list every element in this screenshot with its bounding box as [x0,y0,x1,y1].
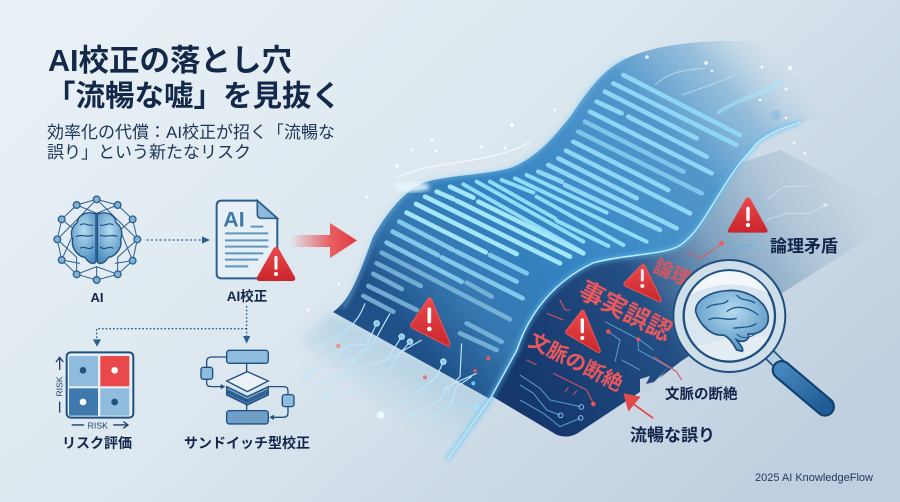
torn edge of sheet [640,366,668,392]
dotted branch arrows [93,306,250,347]
icon: sandwich proofreading flow [201,350,294,424]
red arrow: fluent error [623,393,653,418]
label: AI: AI [90,290,104,305]
error text: jijitsu gonin: 事実誤認 [574,276,676,347]
warning icon: sheet lower [566,310,600,352]
credit: 2025 AI KnowledgeFlow [755,472,873,484]
text lines on ribbon [363,75,740,350]
subtitle: 誤り」という新たなリスク [47,143,251,162]
label: sandwich proofreading: サンドイッチ型校正 [184,435,310,451]
icon: risk matrix: RISK [54,376,64,397]
brain in lens [696,290,768,351]
ribbon circuit traces [302,303,490,422]
subtitle [47,123,335,162]
sparkle particles and arcs [306,55,806,312]
title: 「流暢な嘘」を見抜く [46,80,341,113]
warning icon: ribbon [411,297,450,346]
label: fluent error: 流暢な誤り [630,426,715,445]
icon: AI brain network [54,196,141,283]
red arrow to ribbon [290,223,357,258]
title: AI校正の落とし穴 [48,44,292,78]
subtitle: 効率化の代償：AI校正が招く「流暢な [47,123,335,142]
circuit traces on sheet [520,186,827,427]
label: risk evaluation: リスク評価 [62,435,132,451]
icon: AI document with warning [217,201,295,281]
label: context break: 文脈の断絶 [665,385,738,403]
error text: bunmyaku no danzetsu: 文脈の断絶 [525,329,626,396]
icon: AI document with warning: AI [223,208,245,232]
dotted arrow: AI to proofreading [147,236,210,244]
error text: ronri: 論理 [650,255,694,291]
icon: risk matrix [54,352,133,430]
warning icon: logic contradiction [728,197,768,233]
translucent lower ribbon [300,312,492,456]
document ribbon [302,41,835,460]
label: AI proofreading: AI校正 [227,288,267,304]
title [46,44,341,113]
label: logic contradiction: 論理矛盾 [770,237,838,256]
icon: risk matrix: RISK [88,420,108,430]
warning icon: sheet centre [624,264,661,302]
ribbon highlight glow [343,58,625,308]
back sheet with errors [485,150,900,437]
magnifying glass [673,260,825,407]
